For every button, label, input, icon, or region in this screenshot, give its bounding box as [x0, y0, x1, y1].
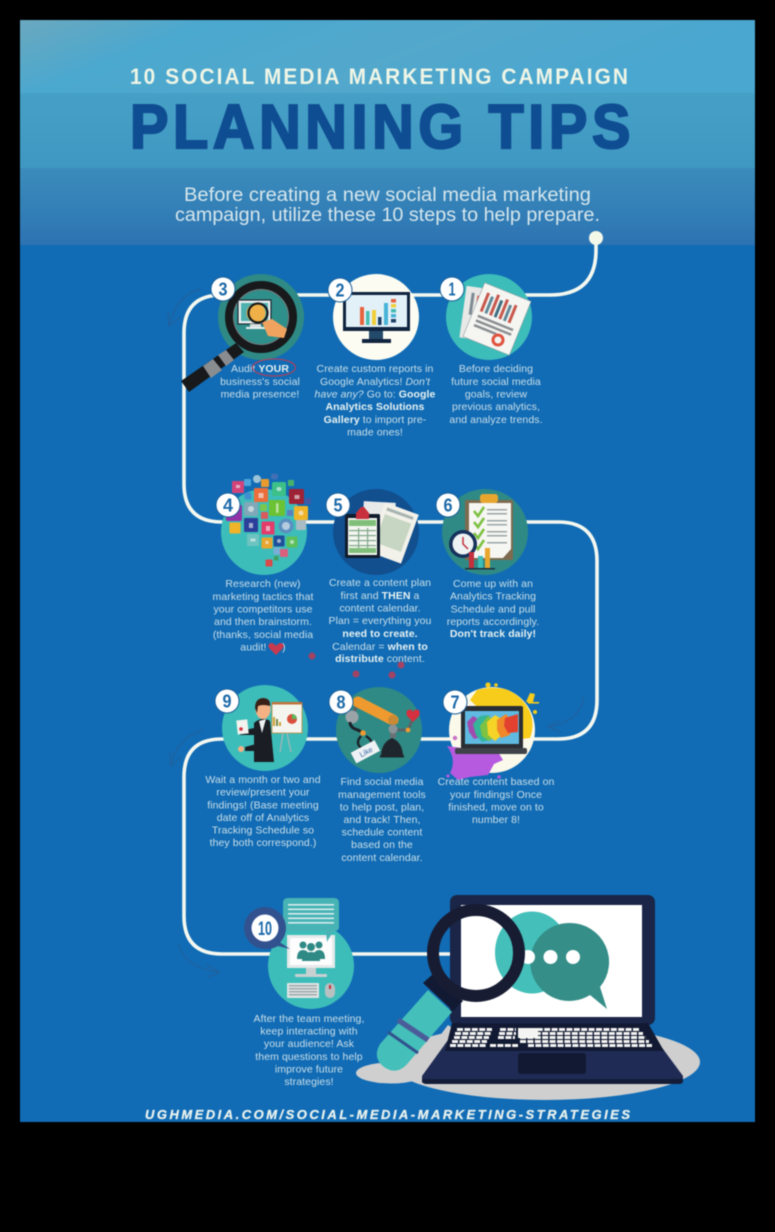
icon: presenter with chart board — [222, 685, 308, 771]
laptop base and keyboard — [422, 1022, 683, 1084]
number badge 4: 4 — [223, 496, 233, 516]
step 6 text: Analytics Tracking — [450, 590, 536, 602]
step 9 text: findings! (Base meeting — [207, 800, 319, 812]
step 10 text: improve future — [275, 1064, 343, 1076]
number badge 1 — [440, 277, 464, 301]
laptop lid and screen — [450, 895, 655, 1025]
step 4 text: marketing tactics that — [213, 591, 313, 603]
step 2 text: Analytics Solutions — [326, 401, 425, 413]
step 8 text: management tools — [338, 789, 426, 801]
illustration: laptop with magnifier and speech bubbles — [356, 895, 700, 1100]
step 1 — [440, 274, 543, 426]
step 2 text: Create custom reports in — [317, 363, 434, 375]
step 9 text: Tracking Schedule so — [212, 824, 314, 836]
number badge 8 — [329, 690, 353, 714]
step 3 text: Audit YOUR — [231, 363, 289, 375]
step 5 text: Calendar = when to — [332, 641, 428, 653]
number badge 9: 9 — [222, 692, 232, 712]
icon: magnifying glass over monitor — [181, 274, 304, 392]
number badge 1: 1 — [448, 280, 456, 300]
step 1 text: and analyze trends. — [449, 414, 543, 426]
number badge 2: 2 — [336, 280, 344, 300]
step 9 text: they both correspond.) — [210, 837, 316, 849]
number badge 7 — [443, 690, 467, 714]
number badge 6 — [436, 493, 460, 517]
red scribble around YOUR — [252, 359, 296, 376]
icon: report papers — [446, 274, 532, 360]
step 4 — [213, 474, 313, 654]
step 3 text: business's social — [220, 376, 300, 388]
icon: checklist clipboard with clock — [442, 489, 528, 575]
step 3 — [181, 274, 304, 400]
step 10 text: your audience! Ask — [264, 1038, 355, 1050]
magnifier — [377, 910, 519, 1071]
number badge 5: 5 — [334, 496, 342, 516]
step 10 text: strategies! — [284, 1076, 334, 1088]
step 3 text: media presence! — [221, 388, 299, 400]
number badge 4 — [216, 493, 240, 517]
step 6 text: Come up with an — [453, 578, 533, 590]
step 10 text: keep interacting with — [260, 1026, 358, 1038]
step 1 text: previous analytics, — [452, 401, 540, 413]
step 5 — [326, 489, 432, 665]
step 7 — [438, 682, 554, 826]
timeline path — [184, 231, 603, 954]
number badge 2 — [328, 278, 352, 302]
intro text: Before creating a new social media marketing — [184, 185, 591, 206]
step 7 text: your findings! Once — [450, 789, 542, 801]
step 5 text: Plan = everything you — [329, 615, 432, 627]
speech bubbles — [495, 912, 609, 1009]
step 5 text: distribute content. — [335, 653, 425, 665]
step 4 text: your competitors use — [213, 604, 313, 616]
number badge 10 — [252, 914, 278, 942]
step 8 text: content calendar. — [341, 852, 423, 864]
number badge 3: 3 — [218, 280, 228, 300]
step 4 text: Research (new) — [225, 578, 301, 590]
red hearts — [268, 643, 404, 678]
number badge 9 — [215, 689, 239, 713]
step 8 text: to help post, plan, — [340, 802, 424, 814]
grey shadow shapes — [356, 1024, 700, 1100]
step 6 text: Don't track daily! — [450, 628, 536, 640]
step 1 text: future social media — [451, 376, 541, 388]
number badge 6: 6 — [444, 496, 452, 516]
step 9 — [205, 685, 321, 849]
step 5 text: first and THEN a — [341, 590, 419, 602]
icon: robot arm with like tag — [336, 687, 422, 773]
step 2 text: Google Analytics! Don't — [320, 376, 430, 388]
step 6 text: Schedule and pull — [451, 604, 535, 616]
step 4 text: (thanks, social media — [213, 629, 313, 641]
step 6 — [436, 489, 539, 640]
title: planning tips: PLANNING TIPS — [130, 93, 635, 162]
step 2 text: made ones! — [347, 426, 403, 438]
step 1 text: goals, review — [465, 388, 527, 400]
step 10 text: them questions to help — [255, 1051, 363, 1063]
step 9 text: review/present your — [216, 786, 310, 798]
step 8 — [329, 687, 426, 864]
number badge 8: 8 — [336, 692, 346, 712]
step 7 text: number 8! — [472, 814, 520, 826]
icon: robot arm with like tag: Like — [358, 745, 374, 759]
footer url: UGHMEDIA.COM/SOCIAL-MEDIA-MARKETING-STRATEGIES — [145, 1107, 630, 1122]
icon: monitor with bar chart — [333, 274, 419, 360]
step 4 text: and then brainstorm. — [214, 616, 312, 628]
step 2 text: Gallery to import pre- — [324, 414, 426, 426]
step 8 text: and track! Then, — [344, 814, 420, 826]
step 2 — [315, 274, 436, 438]
step 5 text: Create a content plan — [329, 577, 431, 589]
intro text — [175, 185, 600, 226]
step 10 — [244, 898, 364, 1088]
step 7 text: Create content based on — [438, 776, 554, 788]
step 8 text: Find social media — [340, 776, 424, 788]
step 8 text: schedule content — [342, 826, 422, 838]
icon: laptop with paint splashes — [446, 682, 539, 780]
step 6 text: reports accordingly. — [447, 616, 539, 628]
faint swirl arrows — [168, 289, 584, 977]
title: top line: 10 SOCIAL MEDIA MARKETING CAMPAIGN — [130, 64, 630, 89]
step 1 text: Before deciding — [459, 363, 533, 375]
icon: desktop computer with chat bubble — [244, 898, 354, 1009]
step 5 text: need to create. — [342, 628, 418, 640]
number badge 7: 7 — [450, 692, 460, 712]
step 9 text: date off of Analytics — [217, 812, 309, 824]
step 9 text: Wait a month or two and — [205, 774, 321, 786]
number badge 5 — [326, 493, 350, 517]
step 8 text: based on the — [351, 839, 413, 851]
step 4 text: audit! ♥♥) — [240, 642, 286, 654]
icon: cloud of app icons — [221, 474, 311, 575]
step 10 text: After the team meeting, — [254, 1013, 364, 1025]
icon: clipboard and content plan papers — [333, 489, 419, 575]
number badge 10: 10 — [258, 919, 272, 940]
step 7 text: finished, move on to — [448, 802, 544, 814]
header band — [20, 20, 755, 245]
intro text: campaign, utilize these 10 steps to help prepare. — [175, 205, 600, 226]
step 2 text: have any? Go to: Google — [315, 388, 435, 400]
step 5 text: content calendar. — [339, 602, 421, 614]
